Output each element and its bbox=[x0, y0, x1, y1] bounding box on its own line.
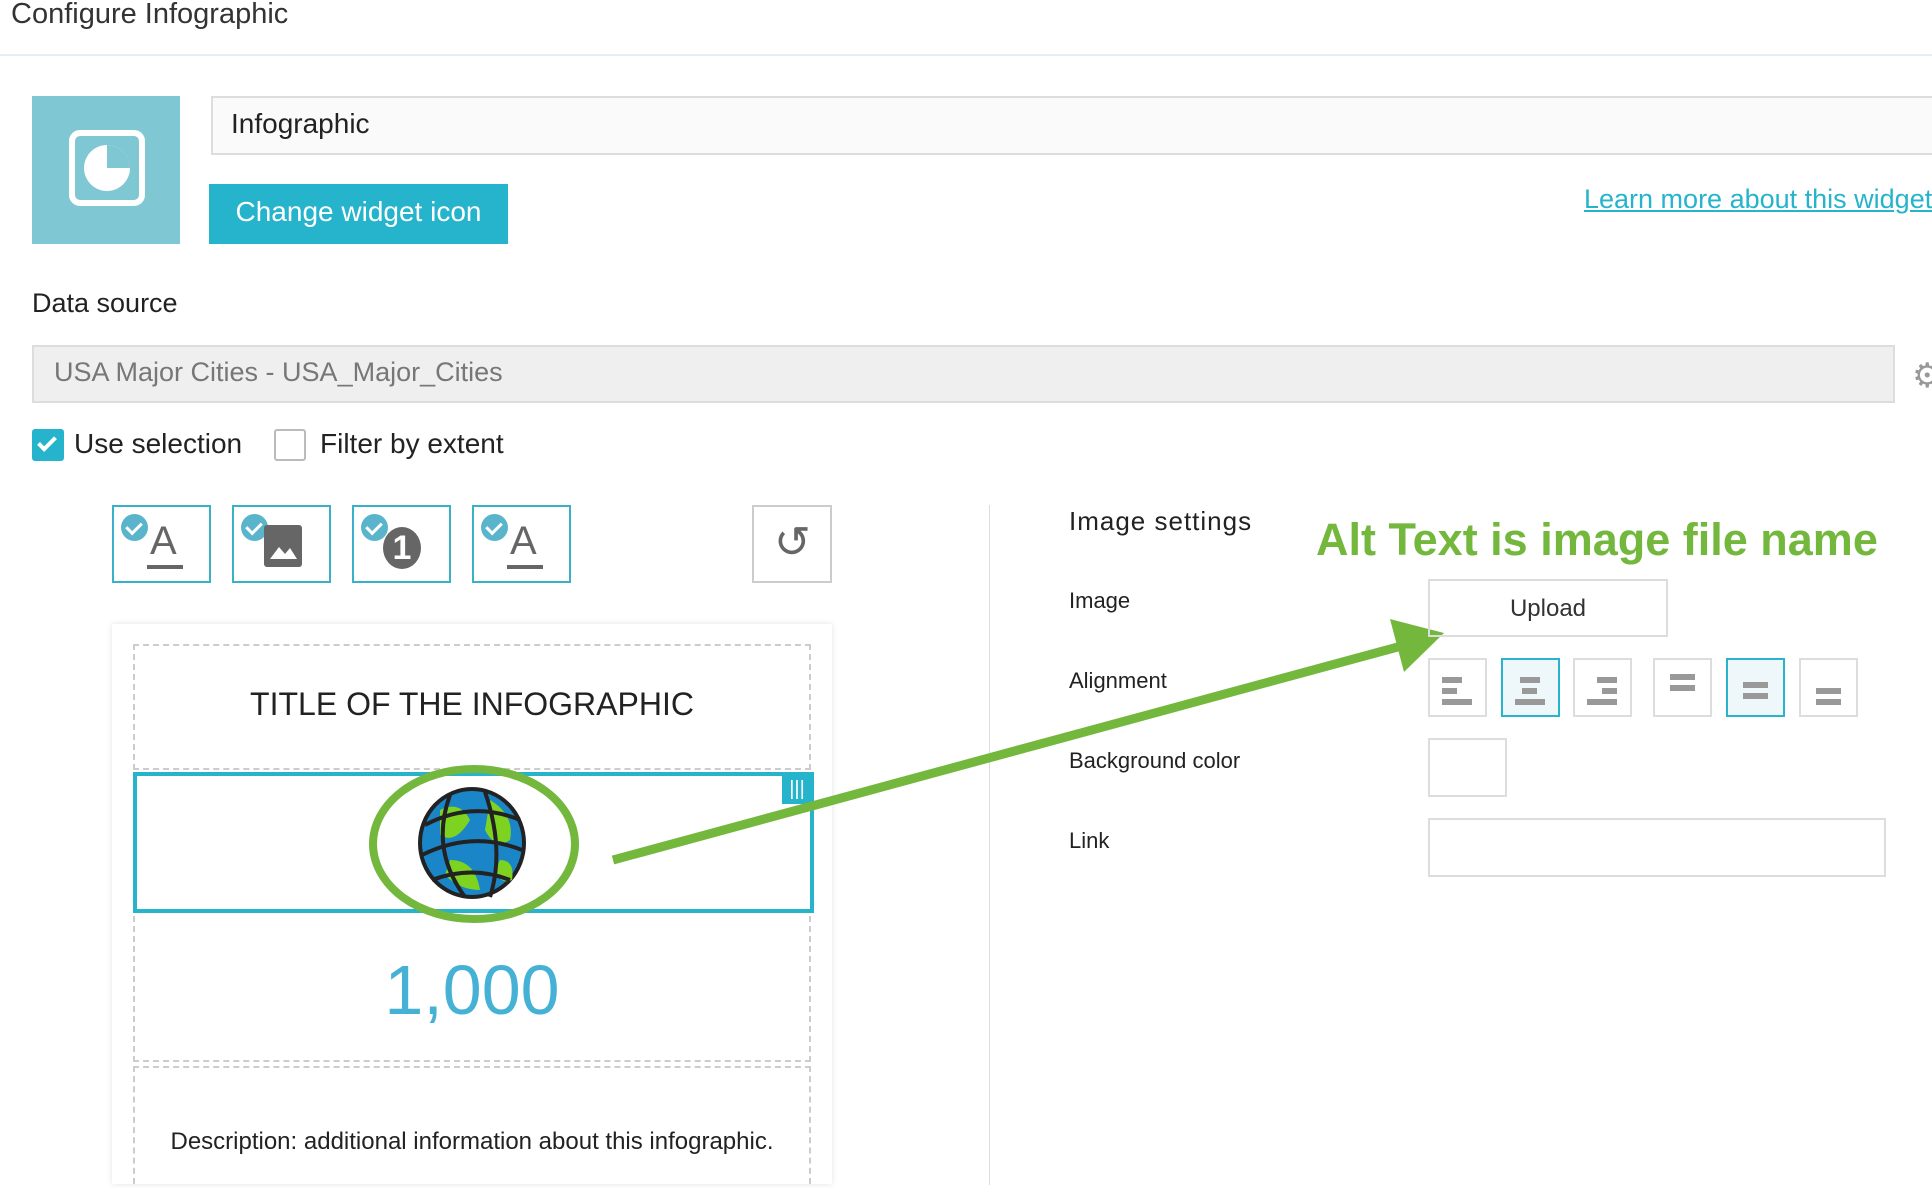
toolbar: text: A bbox=[150, 519, 177, 563]
handle bbox=[782, 774, 812, 804]
toolbar: image bbox=[232, 505, 331, 583]
toolbar: number: 1 bbox=[393, 529, 411, 567]
upload button bbox=[1428, 579, 1668, 637]
background color box bbox=[1428, 738, 1507, 797]
toolbar: text 2 bbox=[472, 505, 571, 583]
change icon button bbox=[209, 184, 508, 244]
description: Description: additional information about this infographic. bbox=[170, 1128, 774, 1155]
highlight ellipse bbox=[373, 769, 575, 919]
widget icon bbox=[32, 96, 180, 244]
toolbar: text bbox=[112, 505, 211, 583]
arrow bbox=[613, 619, 1444, 860]
callout text: Alt Text is image file name bbox=[1316, 514, 1878, 565]
toolbar: text 2: A bbox=[510, 519, 537, 563]
learn more link: Learn more about this widget bbox=[1584, 184, 1932, 214]
checkboxes bbox=[32, 428, 504, 461]
toolbar: number bbox=[352, 505, 451, 583]
text: Background color bbox=[1069, 748, 1240, 773]
image section bbox=[133, 772, 814, 913]
change icon button: Change widget icon bbox=[236, 196, 481, 227]
text: Alignment bbox=[1069, 668, 1167, 693]
checkboxes: Use selection bbox=[74, 428, 242, 459]
link input bbox=[1428, 818, 1886, 877]
number: 1,000 bbox=[384, 951, 560, 1029]
globe icon bbox=[420, 789, 524, 897]
undo button bbox=[752, 505, 832, 583]
labels: Image bbox=[1069, 588, 1130, 613]
name input: Infographic bbox=[231, 108, 370, 139]
infographic preview card bbox=[112, 624, 832, 1184]
name input bbox=[211, 96, 1932, 155]
data source input bbox=[32, 345, 1895, 403]
data source label: Data source bbox=[32, 288, 178, 318]
alignment buttons bbox=[1428, 658, 1487, 717]
text: Link bbox=[1069, 828, 1109, 853]
divider bbox=[989, 505, 990, 1185]
handle: ||| bbox=[789, 778, 805, 800]
image settings heading: Image settings bbox=[1069, 506, 1252, 536]
data source input: USA Major Cities - USA_Major_Cities bbox=[54, 357, 503, 387]
undo button: ↺ bbox=[774, 518, 811, 567]
checkboxes: Filter by extent bbox=[320, 428, 504, 459]
upload button: Upload bbox=[1510, 595, 1586, 622]
title section bbox=[133, 644, 811, 770]
title section: TITLE OF THE INFOGRAPHIC bbox=[250, 686, 694, 722]
